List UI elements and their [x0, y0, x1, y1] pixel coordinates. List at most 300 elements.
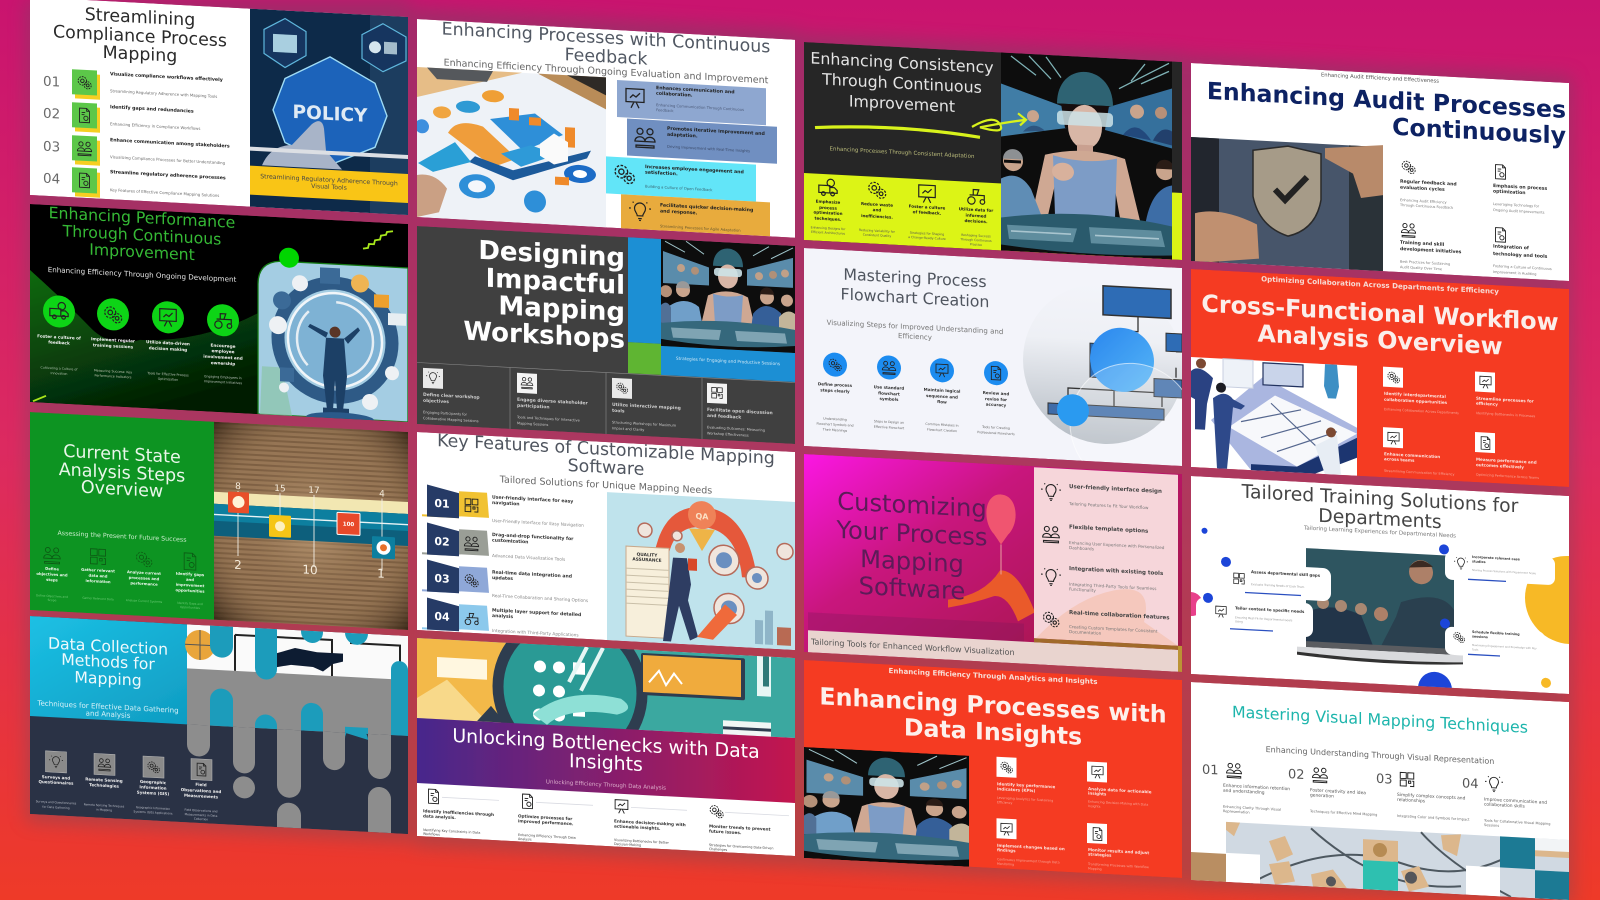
image: world map and teal drips [185, 624, 408, 834]
slide 6: Designing Impactful Mapping Workshops [417, 226, 795, 444]
item 1 [37, 294, 81, 377]
caption band: Visual Tools [311, 183, 347, 192]
heading: Improvement [89, 240, 195, 264]
item 2: Mapping Sessions [517, 421, 548, 427]
list of four steps: 02 [43, 106, 60, 123]
item 1: Regular feedback and [1400, 179, 1457, 188]
card: tailor content: Ensuring Best-Fit for Departmental Goals [1235, 615, 1293, 622]
item 1 [36, 547, 68, 603]
subtitle: Efficiency [898, 331, 932, 342]
item 2: improved performance. [518, 818, 574, 826]
slide 16: Mastering Visual Mapping Techniques [1191, 682, 1569, 900]
item 3: processes and [129, 575, 160, 581]
item 2 [516, 373, 588, 429]
row 02 [422, 522, 574, 563]
image: timeline on wood: 100 [343, 522, 354, 528]
feature 3 [1041, 565, 1164, 597]
item 1: Identify interdepartmental [1384, 391, 1446, 399]
item 2: Implement regular [91, 336, 136, 344]
image: wooden cubes on network lines [1191, 820, 1569, 900]
heading: Enhancing Performance [49, 203, 235, 232]
row 04: analysis [492, 613, 513, 620]
item 4: Tools for Creating [981, 425, 1010, 430]
card: case studies: studies [1472, 559, 1486, 564]
heading: Through Continuous [62, 221, 221, 249]
item 4: and feedback [707, 413, 742, 421]
item 4: Identify gaps [176, 571, 205, 577]
item 4: Field [195, 782, 207, 787]
green wave [30, 270, 258, 414]
item 4 [176, 552, 205, 610]
item 3: Information [139, 784, 167, 791]
item 1: Define clear workshop [423, 392, 480, 401]
heading: Designing [478, 236, 625, 274]
feature 4: Documentation [1069, 629, 1102, 636]
item 2 [859, 182, 896, 238]
item 2: Reducing Variability for [859, 228, 896, 234]
item 3: Common Mistakes in [925, 422, 959, 428]
item 4: Review and [983, 390, 1009, 396]
list of four steps: Identify gaps and redundancies [110, 104, 194, 115]
item 4: improvement [176, 582, 204, 588]
step bar 2: adaptation. [667, 132, 698, 139]
item 3: Flowchart Creation [927, 428, 957, 433]
item 2: Use standard [874, 384, 904, 391]
step 02: generation [1310, 792, 1334, 800]
caption band [250, 166, 408, 203]
step 02: 02 [1288, 767, 1305, 783]
feature 3: Integrating Third-Party Tools for Seamless [1069, 582, 1156, 591]
step 01: and understanding [1223, 788, 1265, 796]
item 1: Enhancing Collaboration Across Departments [1384, 407, 1459, 415]
heading: Feedback [565, 45, 648, 70]
item 4 [977, 360, 1015, 436]
image: hands holding a shield with check mark [1191, 135, 1383, 271]
item 3 [146, 300, 190, 382]
item 3: sequence and [926, 393, 958, 400]
heading: Enhancing Processes with Continuous [442, 19, 770, 57]
list of four steps: 03 [43, 139, 60, 156]
item 2: Enhancing Decision-Making with Data [1088, 800, 1148, 807]
image: timeline on wood: 2 [234, 558, 242, 572]
caption band: Streamlining Regulatory Adherence Through [260, 173, 398, 187]
item 1: objectives [423, 398, 449, 405]
item 2: Identifying Bottlenecks in Processes [1476, 411, 1536, 418]
item 4: Challenges [709, 847, 727, 852]
heading: Enhancing Audit Processes [1207, 77, 1566, 124]
item 2: Effective Flowchart [874, 425, 905, 430]
item 3: Tools for Effective Process [146, 371, 189, 377]
item 4: Opportunities [180, 605, 200, 610]
item 4: Improvement Initiatives [204, 379, 242, 385]
step bar 3: satisfaction. [645, 170, 678, 177]
list of four steps: Enhance communication among stakeholders [110, 137, 230, 150]
feature 3: Functionality [1069, 587, 1096, 593]
image: policy hexagon: POLICY [293, 102, 368, 127]
list of four steps: Streamline regulatory adherence processes [110, 169, 226, 181]
step bar 3: Building a Culture of Open Feedback [645, 185, 713, 192]
row 04: Multiple layer support for detailed [492, 607, 581, 618]
row 03: 03 [434, 572, 450, 586]
image: flowchart in a disc [1023, 280, 1196, 493]
item 2: Leveraging Technology for [1493, 202, 1540, 208]
image: quality assurance illustration: QA [696, 512, 709, 521]
item 1: Understanding [823, 417, 847, 422]
decorative dots [1179, 526, 1600, 715]
item 2: Gather relevant [81, 567, 115, 574]
item 1: for Data Gathering [42, 805, 70, 810]
item 1: Enhancing Audit Efficiency [1400, 198, 1447, 205]
feature 2: Dashboards [1069, 545, 1094, 551]
item 1: Surveys and [42, 774, 70, 781]
colour blocks [628, 237, 795, 382]
image: timeline on wood: 10 [302, 562, 318, 577]
item 3: Implement changes based on [997, 843, 1065, 851]
item 3: development initiatives [1400, 246, 1462, 255]
step bar 1 [617, 80, 766, 125]
feature 2: Enhancing User Experience with Personalized [1069, 540, 1165, 550]
item 4: Optimizing Performance Across Teams [1476, 473, 1539, 480]
heading: Data Insights [904, 713, 1082, 751]
row 04: 04 [434, 610, 450, 624]
item 3: Utilize interactive mapping [612, 402, 681, 411]
item 3: across teams [1384, 456, 1415, 463]
item 3: Audit Quality Over Time [1400, 265, 1442, 271]
step bar 4 [621, 194, 770, 236]
item 1: Flowchart Symbols and [816, 422, 854, 428]
row 03: updates [492, 575, 513, 582]
item 4: Field Observations and [184, 808, 218, 813]
item 1 [1399, 161, 1457, 210]
item 1: Scope [48, 598, 57, 602]
item 2: optimization [1493, 189, 1526, 196]
subtitle: Enhancing Understanding Through Visual Representation [1266, 745, 1494, 766]
image: quality assurance illustration [607, 492, 795, 650]
card: case studies: Sharing Process Solutions with Department Scale [1472, 568, 1536, 575]
item 4: and [186, 577, 194, 582]
feature 2: Flexible template options [1069, 525, 1149, 535]
subtitle: and Analysis [86, 708, 131, 720]
heading: Overview [81, 478, 163, 502]
item 2: data and [89, 573, 108, 579]
item 2: symbols [880, 396, 899, 402]
card: flexible sessions: Tools [1472, 647, 1479, 652]
item 3: Optimization [158, 377, 178, 382]
image: blueprint with orange and blue blocks [415, 67, 606, 227]
item 3 [908, 184, 946, 241]
card: case studies: Incorporate relevant case [1472, 555, 1521, 561]
item 2: information [85, 578, 111, 584]
slide 10: Key Features of Customizable Mapping Software [417, 430, 795, 650]
item 1: Emphasize [816, 199, 841, 205]
image: timeline on wood: 17 [308, 486, 320, 496]
item 2: Remote Sensing [85, 776, 123, 783]
item 2 [874, 355, 905, 430]
subtitle: Enhancing Efficiency Through Ongoing Development [48, 265, 236, 284]
image: policy hexagon [250, 9, 408, 215]
item 1: steps clearly [820, 387, 850, 394]
item 3 [126, 551, 163, 604]
item 1: Efficient Architectures [811, 230, 845, 236]
item 3: Training and skill [1400, 240, 1445, 248]
item 3: Systems (GIS) Applications [134, 809, 173, 816]
item 2: Optimize processes for [518, 813, 573, 821]
list of four steps: Key Features of Effective Compliance Mapping Solutions [110, 187, 219, 198]
item 4: Reshaping Success [961, 233, 991, 238]
panel: feature list [1034, 467, 1178, 646]
item 4 [959, 189, 993, 248]
heading: Analysis Overview [1257, 320, 1503, 361]
row 03: Real-time data integration and [492, 569, 572, 580]
item 4: opportunities [176, 587, 205, 594]
item 4 [203, 303, 243, 385]
item 4: informed [966, 213, 987, 219]
illustration: balloon and ribbon [808, 484, 1035, 642]
list of four steps: Streamlining Regulatory Adherence with Mapping Tools [110, 88, 217, 99]
heading: Tailored Training Solutions for [1241, 482, 1519, 517]
item 4: Practice [970, 242, 982, 247]
slide 1: Streamlining Compliance Process Mapping [30, 0, 408, 215]
heading: Mapping [498, 291, 625, 328]
image: timeline on wood: 15 [274, 484, 286, 495]
step bar 3 [606, 156, 756, 202]
item 1: Define Objectives and [36, 593, 68, 599]
item 1: Surveys and Questionnaires [36, 799, 77, 805]
item 1: Foster a culture of [37, 333, 81, 341]
heading: Software [859, 572, 965, 606]
item 1 [423, 789, 494, 840]
item 1 [36, 750, 77, 810]
heading: Flowchart Creation [841, 284, 989, 311]
item 1: Through Continuous Feedback [1399, 203, 1454, 210]
item 2: Reduce waste [861, 201, 893, 208]
image: meeting around a table [803, 747, 969, 867]
item 3: Analyze Current Systems [126, 598, 163, 604]
step bar 4: and response. [660, 208, 698, 216]
item 1: Their Meanings [822, 427, 848, 433]
row 02: Advanced Data Visualization Tools [492, 553, 566, 563]
row 01: navigation [492, 500, 520, 507]
step 02: Foster creativity and idea [1310, 787, 1366, 796]
overline: Enhancing Efficiency Through Analytics and Insights [889, 666, 1097, 686]
title band: Unlocking Bottlenecks with Data [452, 725, 760, 763]
item 1: steps [46, 577, 59, 583]
slide 3: Enhancing Consistency Through Continuous Improvement [804, 42, 1182, 260]
item 4: Identify Gaps and [177, 601, 203, 606]
item 4: decisions. [964, 218, 988, 224]
item 2 [84, 753, 125, 813]
step 03: 03 [1376, 772, 1393, 788]
row 04 [422, 597, 581, 639]
item 1: Cultivating a Culture of [41, 366, 78, 372]
feature 3: Integration with existing tools [1069, 566, 1164, 577]
slide 2: Enhancing Processes with Continuous Feedback [415, 18, 795, 238]
title band: Unlocking Efficiency Through Data Analysis [546, 779, 666, 792]
item 3 [134, 755, 173, 816]
card: assess skill gaps: Evaluate Training Needs of Each Team [1251, 582, 1305, 589]
heading: Streamlining [85, 5, 195, 31]
item 4: Engaging Employees in [204, 374, 242, 380]
image: quality assurance illustration: ASSURANCE [632, 556, 662, 564]
heading: Key Features of Customizable Mapping [437, 431, 775, 469]
step 03 [1376, 771, 1470, 822]
list of four steps: Visualize compliance workflows effectively [110, 71, 223, 83]
step 01: 01 [1202, 763, 1219, 778]
item 4: Transforming Processes with Workflow [1087, 862, 1149, 869]
item 4: Monitor results and adjust [1088, 847, 1149, 855]
item 4: Professional Flowcharts [977, 430, 1015, 436]
step 04: Sessions [1484, 823, 1499, 828]
row 01: User-Friendly Interface for Easy Navigation [492, 518, 584, 529]
item 3: Geographic [140, 779, 167, 785]
heading: Workshops [463, 316, 625, 355]
item 3: decision making [149, 345, 187, 352]
item 2: in Mapping [96, 808, 112, 812]
item 1 [423, 368, 480, 423]
item 3: Utilize data-driven [146, 339, 190, 346]
item 2: Technologies [89, 782, 119, 789]
item 3: Structuring Workshops for Maximum [612, 420, 677, 428]
step 01 [1202, 762, 1290, 817]
item 2: flowchart [878, 390, 900, 397]
step 02: Techniques for Effective Mind Mapping [1309, 809, 1377, 817]
item 1: indicators (KPIs) [997, 786, 1035, 793]
step 01: Enhancing Clarity Through Visual [1223, 805, 1281, 812]
item 1: Enhancing Designs for [811, 225, 846, 231]
card: tailor content: Using [1235, 619, 1243, 624]
item 4 [1475, 432, 1539, 480]
caption band: Tailoring Tools for Enhanced Workflow Visualization [810, 637, 1015, 657]
image: isometric team at workflow table [1191, 357, 1357, 476]
image: woman with visor and meeting [1001, 52, 1174, 260]
heading: Your Process [835, 516, 988, 552]
item 4: Integration of [1493, 244, 1530, 251]
item 3 [924, 357, 961, 433]
step 03: Integrating Color and Symbols for Impact [1397, 814, 1470, 822]
card: flexible sessions: Maximizing Engagement and Knowledge with Key [1472, 643, 1537, 650]
item 3: Analyze current [127, 569, 161, 576]
item 4: accuracy [986, 402, 1007, 408]
subtitle: Enhancing Processes Through Consistent Adaptation [830, 146, 975, 160]
card: flexible sessions: Schedule flexible training [1472, 630, 1520, 636]
item 2: insights [1088, 791, 1107, 797]
step 01: Representation [1223, 809, 1250, 815]
item 2: Emphasis on process [1493, 183, 1547, 192]
item 1: Innovation [51, 371, 67, 376]
feature 4 [1044, 609, 1170, 639]
item 3 [1400, 223, 1462, 272]
feature 1: User-friendly interface design [1069, 484, 1162, 495]
item 4: Collection [194, 817, 208, 821]
item 1: collaboration opportunities [1384, 397, 1448, 405]
heading: Departments [1318, 506, 1442, 533]
step 04: collaboration skills [1484, 802, 1525, 810]
slide 9: Current State Analysis Steps Overview [30, 412, 408, 630]
step 04: Tools for Collaborative Visual Mapping [1483, 818, 1551, 826]
item 4: Utilize data for [959, 206, 993, 213]
subtitle: Assessing the Present for Future Success [58, 530, 186, 544]
slide 5: Enhancing Performance Through Continuous Improvement [30, 202, 408, 428]
heading: Enhancing Consistency [810, 48, 994, 77]
item 1: Leveraging Analytics for Sustaining [997, 796, 1053, 803]
item 4 [1087, 823, 1149, 874]
row 03 [422, 559, 589, 604]
feature 4: Creating Custom Templates for Consistent [1069, 624, 1158, 634]
item 4 [707, 383, 773, 439]
item 3 [1383, 427, 1454, 476]
item 1: data analysis. [423, 813, 456, 820]
row 02: Drag-and-drop functionality for [492, 532, 574, 542]
item 2: participation [517, 403, 550, 411]
step bar 1: collaboration. [656, 91, 693, 99]
row 03: Real-Time Collaboration and Sharing Options [492, 593, 589, 604]
item 4: Fostering a Culture of Continuous [1493, 264, 1552, 271]
item 4: Strategies for Overcoming Data-Driven [709, 843, 773, 850]
item 4: Improvement in Auditing [1493, 270, 1537, 276]
item 1: feedback [48, 339, 70, 346]
caption band [808, 626, 1182, 672]
heading: Mapping [74, 667, 142, 690]
item 2: Gather Relevant Data [82, 596, 114, 601]
item 4: strategies [1088, 852, 1112, 858]
step 04 [1462, 775, 1551, 831]
item 2: Measuring Success: Key [94, 368, 132, 374]
title band: Insights [569, 750, 643, 776]
image: timeline on wood: 1 [377, 566, 385, 581]
feature 1: Tailoring Features to Fit Your Workflow [1068, 501, 1149, 510]
item 4 [181, 758, 221, 822]
item 4: involvement and [203, 354, 243, 361]
item 3: Decision-Making [614, 842, 641, 847]
item 4: Encourage [211, 343, 236, 349]
dividers [417, 362, 795, 444]
heading: Mastering Visual Mapping Techniques [1232, 702, 1528, 737]
slide 14: Unlocking Bottlenecks with Data Insights [417, 610, 795, 856]
heading: Through Continuous [821, 69, 982, 97]
item 2: Enhancing Efficiency Through Data [518, 833, 576, 840]
card: tailor content: Tailor content to specific needs [1235, 605, 1305, 614]
feature 1 [1041, 483, 1162, 511]
heading: Continuously [1392, 113, 1566, 150]
item 4: Measurements [184, 793, 219, 799]
image: magnifier and chart flat illustration [417, 610, 795, 774]
item 1 [996, 757, 1056, 807]
item 2: Performance Indicators [95, 373, 132, 379]
item 1 [1383, 367, 1459, 415]
subtitle: Tailoring Learning Experiences for Departmental Needs [1303, 525, 1456, 540]
item 4: Facilitate open discussion [707, 407, 773, 416]
item 1: Identify key performance [997, 781, 1056, 789]
item 4 [1493, 227, 1552, 277]
item 1: Workflows [423, 832, 440, 837]
item 2 [91, 297, 136, 380]
item 3 [614, 800, 686, 850]
item 2: Insights [1088, 804, 1101, 809]
item 3: Enhance decision-making with [614, 818, 686, 827]
overline: Enhancing Audit Efficiency and Effectiveness [1321, 72, 1439, 85]
heading: Mastering Process [843, 265, 987, 291]
item 3: Strategies for Shaping [910, 231, 944, 236]
step 04: Improve communication and [1484, 797, 1547, 806]
item 4: Workshop Effectiveness [707, 431, 749, 438]
row 02: customization [492, 537, 528, 545]
item 1: objectives and [36, 571, 68, 578]
item 2: Remote Sensing Techniques [84, 802, 125, 809]
item 2 [81, 548, 115, 602]
item 2 [518, 794, 576, 844]
item 1: process [819, 205, 837, 211]
item 2: Streamline processes for [1476, 396, 1534, 404]
